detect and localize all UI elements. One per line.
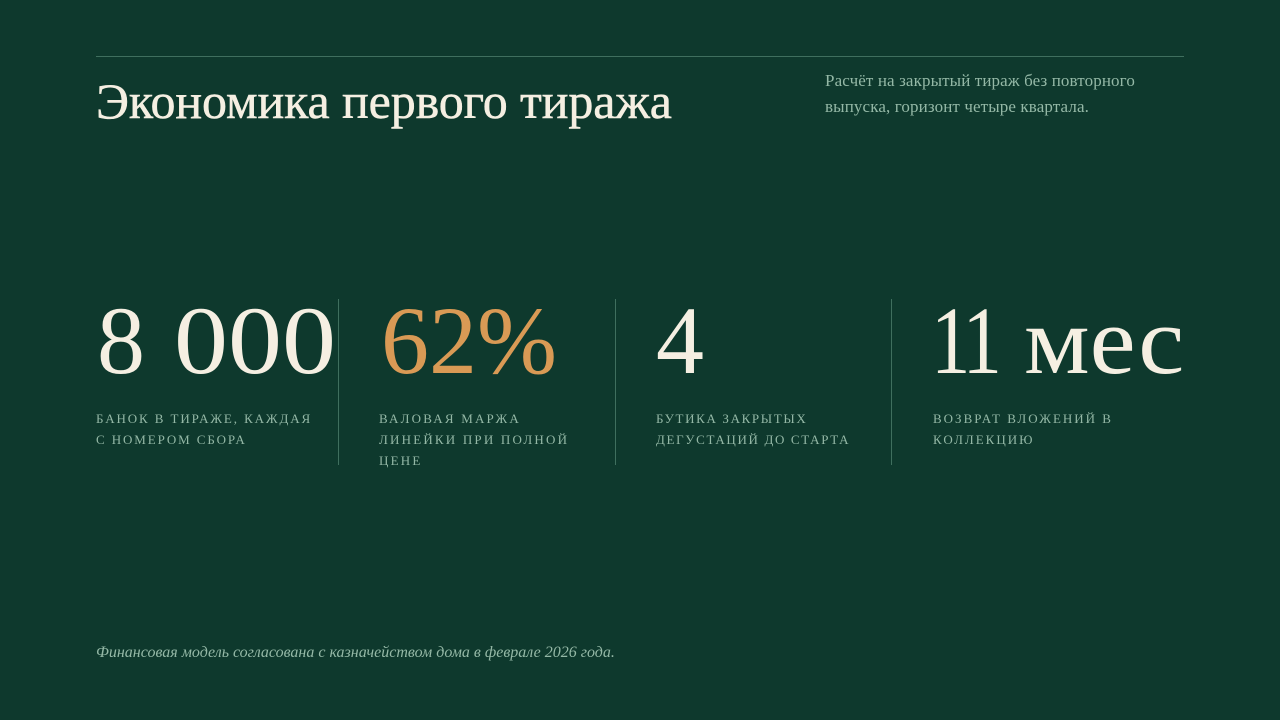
value: 62%: 62% [381, 287, 557, 394]
value: 4: 4 [656, 287, 704, 394]
stat: 4 boutiques [656, 287, 850, 447]
label: tins [96, 411, 312, 447]
label: margin: ВАЛОВАЯ МАРЖА [379, 411, 521, 426]
value: 8 000: 8 [97, 287, 145, 394]
label: tins: С НОМЕРОМ СБОРА [96, 432, 247, 447]
value: 11 мес: 11 [931, 287, 997, 394]
label: margin: ЛИНЕЙКИ ПРИ ПОЛНОЙ [379, 432, 569, 447]
label: tins: БАНОК В ТИРАЖЕ, КАЖДАЯ [96, 411, 312, 426]
value: 11 мес: мес [1024, 287, 1185, 394]
label: payback: КОЛЛЕКЦИЮ [933, 432, 1034, 447]
stat: 62% margin [379, 287, 569, 468]
subtitle text block: выпуска, горизонт четыре квартала. [825, 97, 1089, 116]
value: 8 000: 000 [174, 287, 336, 394]
label: boutiques: ДЕГУСТАЦИЙ ДО СТАРТА [656, 432, 850, 447]
stat: 11 months [931, 287, 1185, 447]
label: margin [379, 411, 569, 468]
label: margin: ЦЕНЕ [379, 453, 422, 468]
label: payback: ВОЗВРАТ ВЛОЖЕНИЙ В [933, 411, 1113, 426]
label: payback [933, 411, 1113, 447]
stat: 8 000 tins [96, 287, 336, 447]
subtitle text block: Расчёт на закрытый тираж без повторного [825, 71, 1135, 90]
title: Экономика первого тиража [96, 73, 672, 129]
footnote: Финансовая модель согласована с казначейством дома в феврале 2026 года. [96, 644, 615, 661]
subtitle text block [825, 71, 1135, 116]
value: 8 000 [97, 287, 336, 394]
label: boutiques: БУТИКА ЗАКРЫТЫХ [656, 411, 807, 426]
label: boutiques [656, 411, 850, 447]
value: 11 мес [931, 287, 1185, 394]
